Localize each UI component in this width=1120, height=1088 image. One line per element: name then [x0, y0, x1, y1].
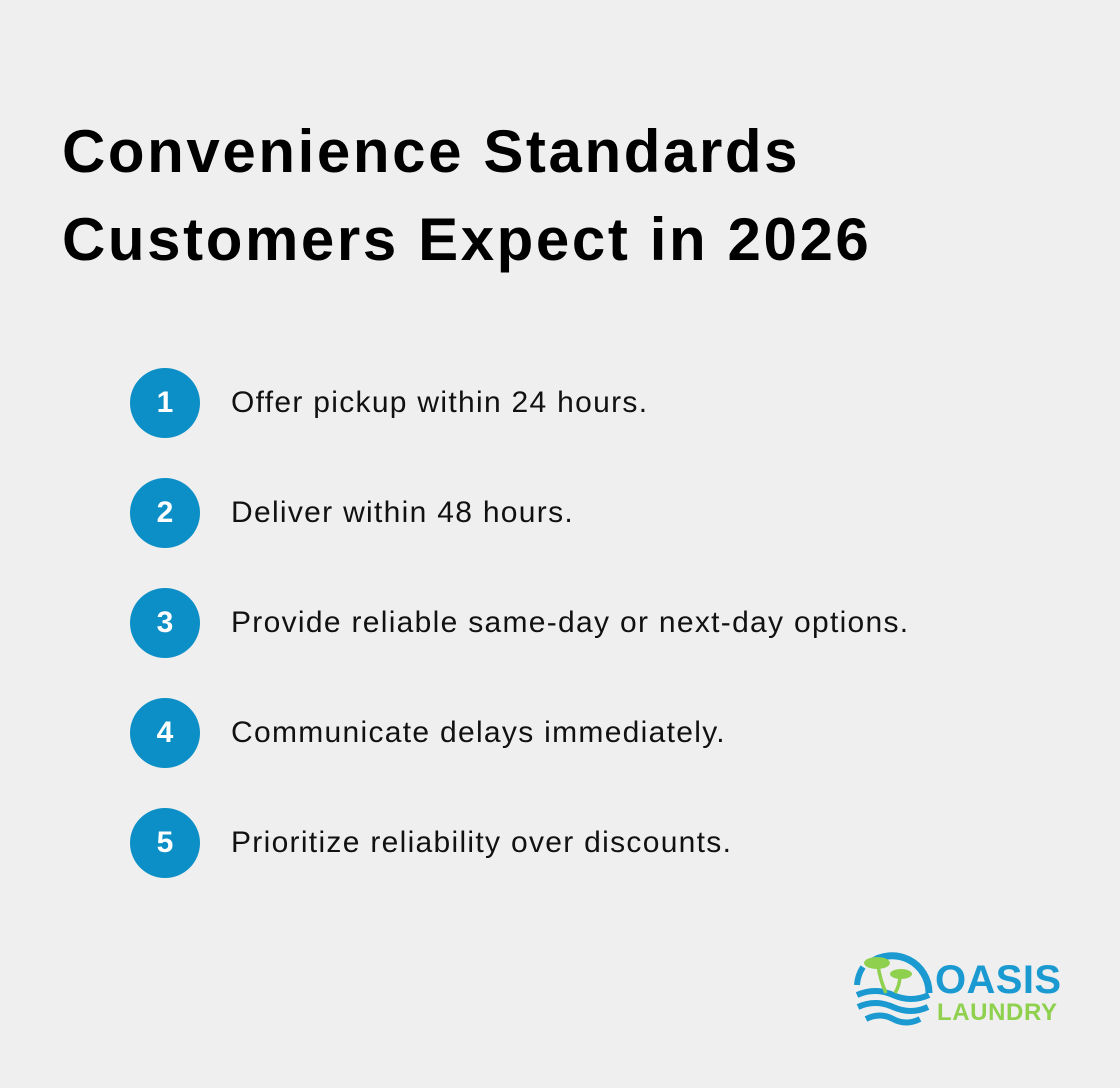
item 3: 3	[157, 606, 173, 639]
item 1: Offer pickup within 24 hours.	[231, 386, 648, 419]
item 2: 2	[157, 496, 173, 529]
logo text: LAUNDRY	[937, 999, 1057, 1026]
item 5: 5	[157, 826, 173, 859]
item 4	[130, 698, 726, 768]
item 5: Prioritize reliability over discounts.	[231, 826, 732, 859]
item 5	[130, 808, 732, 878]
item 4: 4	[157, 716, 173, 749]
item 1	[130, 368, 648, 438]
item 1: 1	[157, 386, 173, 419]
icon: palm circle	[857, 956, 929, 1022]
item 3: Provide reliable same-day or next-day options.	[231, 606, 909, 639]
title: Convenience Standards	[62, 118, 800, 185]
logo text: OASIS	[935, 958, 1061, 1002]
item 2: Deliver within 48 hours.	[231, 496, 574, 529]
title	[62, 118, 871, 273]
item 4: Communicate delays immediately.	[231, 716, 726, 749]
item 3	[130, 588, 909, 658]
logo text	[935, 958, 1061, 1026]
item 2	[130, 478, 574, 548]
title: Customers Expect in 2026	[62, 206, 871, 273]
logo	[854, 952, 1061, 1026]
